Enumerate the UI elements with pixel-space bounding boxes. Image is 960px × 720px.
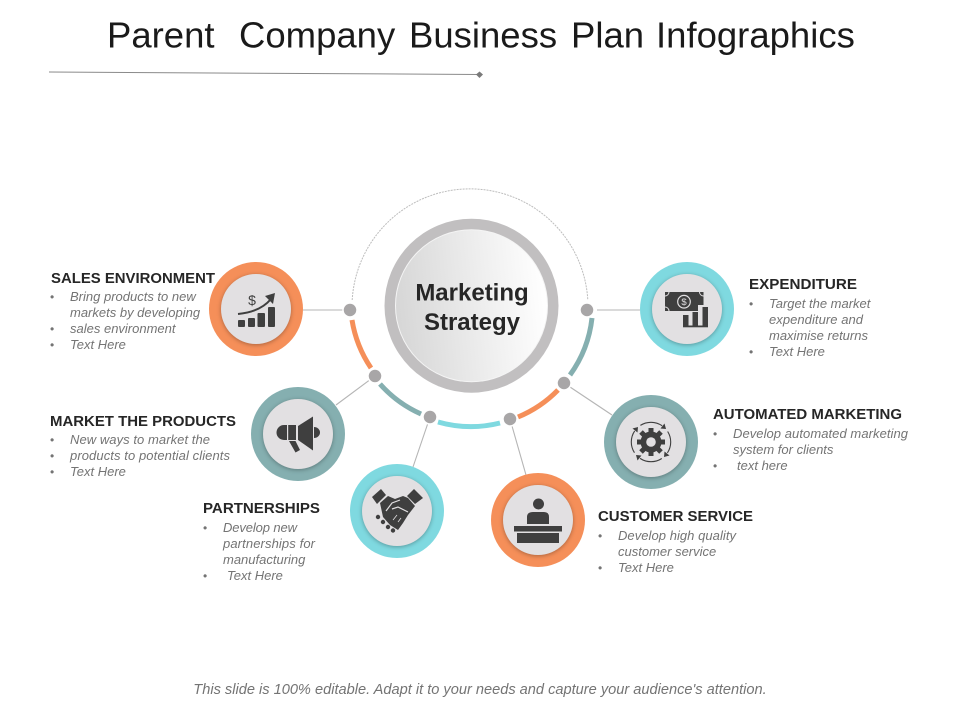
connector lines <box>303 310 640 475</box>
footer note: This slide is 100% editable. Adapt it to your needs and capture your audience's attention. <box>193 682 767 698</box>
icon: reception desk <box>514 498 562 543</box>
text: sales environment: • <box>50 290 54 304</box>
text: automated marketing: • <box>713 427 717 441</box>
text: market the products: • <box>50 433 54 447</box>
text: sales environment: sales environment <box>70 321 177 336</box>
text: customer service: • <box>598 561 602 575</box>
title: Company <box>239 14 396 56</box>
title: Parent <box>107 14 215 56</box>
text: expenditure: • <box>749 297 753 311</box>
text: automated marketing: Develop automated marketing <box>733 426 909 441</box>
text: customer service: Text Here <box>618 560 674 575</box>
icon: gear with arrows <box>631 422 671 462</box>
center circle: Marketing Strategy: Strategy <box>424 309 521 336</box>
text: customer service <box>598 509 753 575</box>
icon: megaphone <box>276 416 320 452</box>
badge: automated marketing <box>604 395 698 489</box>
text: partnerships: Develop new <box>223 520 299 535</box>
text: automated marketing: text here <box>737 458 788 473</box>
text: market the products: MARKET THE PRODUCTS <box>50 414 236 430</box>
dashed arc <box>352 189 588 300</box>
text: sales environment <box>50 271 215 352</box>
text: market the products: New ways to market the <box>70 432 210 447</box>
title underline <box>49 72 483 78</box>
text: customer service: • <box>598 529 602 543</box>
text: partnerships <box>203 501 320 583</box>
text: sales environment: SALES ENVIRONMENT <box>51 271 215 287</box>
badge: expenditure <box>640 262 734 356</box>
text: partnerships: • <box>203 569 207 583</box>
title: Infographics <box>656 14 855 56</box>
text: expenditure: expenditure and <box>769 312 864 327</box>
title: Business <box>409 14 557 56</box>
text: automated marketing: system for clients <box>733 442 834 457</box>
text: customer service: Develop high quality <box>618 528 738 543</box>
text: partnerships: manufacturing <box>223 552 306 567</box>
text: partnerships: PARTNERSHIPS <box>203 501 320 517</box>
text: partnerships: • <box>203 521 207 535</box>
text: market the products: • <box>50 465 54 479</box>
text: market the products: Text Here <box>70 464 126 479</box>
text: market the products: products to potential clients <box>69 448 230 463</box>
text: customer service: CUSTOMER SERVICE <box>598 509 753 525</box>
badge: sales environment <box>209 262 303 356</box>
text: partnerships: partnerships for <box>222 536 316 551</box>
text: sales environment: Text Here <box>70 337 126 352</box>
connector nodes <box>343 303 594 426</box>
icon: rising sales chart: $ <box>248 292 256 308</box>
text: expenditure: • <box>749 345 753 359</box>
text: automated marketing: AUTOMATED MARKETING <box>713 407 902 423</box>
text: expenditure: EXPENDITURE <box>749 277 857 293</box>
center circle: Marketing Strategy <box>384 219 558 393</box>
text: expenditure: Target the market <box>769 296 872 311</box>
badge: partnerships <box>350 464 444 558</box>
center circle: Marketing Strategy: Marketing <box>415 280 529 307</box>
text: sales environment: • <box>50 338 54 352</box>
icon: banknote and bars: $ <box>681 297 687 308</box>
text: market the products <box>50 414 236 479</box>
text: sales environment: • <box>50 322 54 336</box>
text: expenditure: maximise returns <box>769 328 868 343</box>
text: sales environment: markets by developing <box>70 305 201 320</box>
text: expenditure <box>749 277 872 359</box>
text: expenditure: Text Here <box>769 344 825 359</box>
segmented ring <box>352 318 592 427</box>
badge: market the products <box>251 387 345 481</box>
text: sales environment: Bring products to new <box>70 289 197 304</box>
badge: customer service <box>491 473 585 567</box>
text: customer service: customer service <box>618 544 716 559</box>
title: Plan <box>571 14 644 56</box>
text: partnerships: Text Here <box>227 568 283 583</box>
text: market the products: • <box>50 449 54 463</box>
text: automated marketing: • <box>713 459 717 473</box>
text: automated marketing <box>713 407 909 473</box>
icon: handshake <box>372 489 423 533</box>
